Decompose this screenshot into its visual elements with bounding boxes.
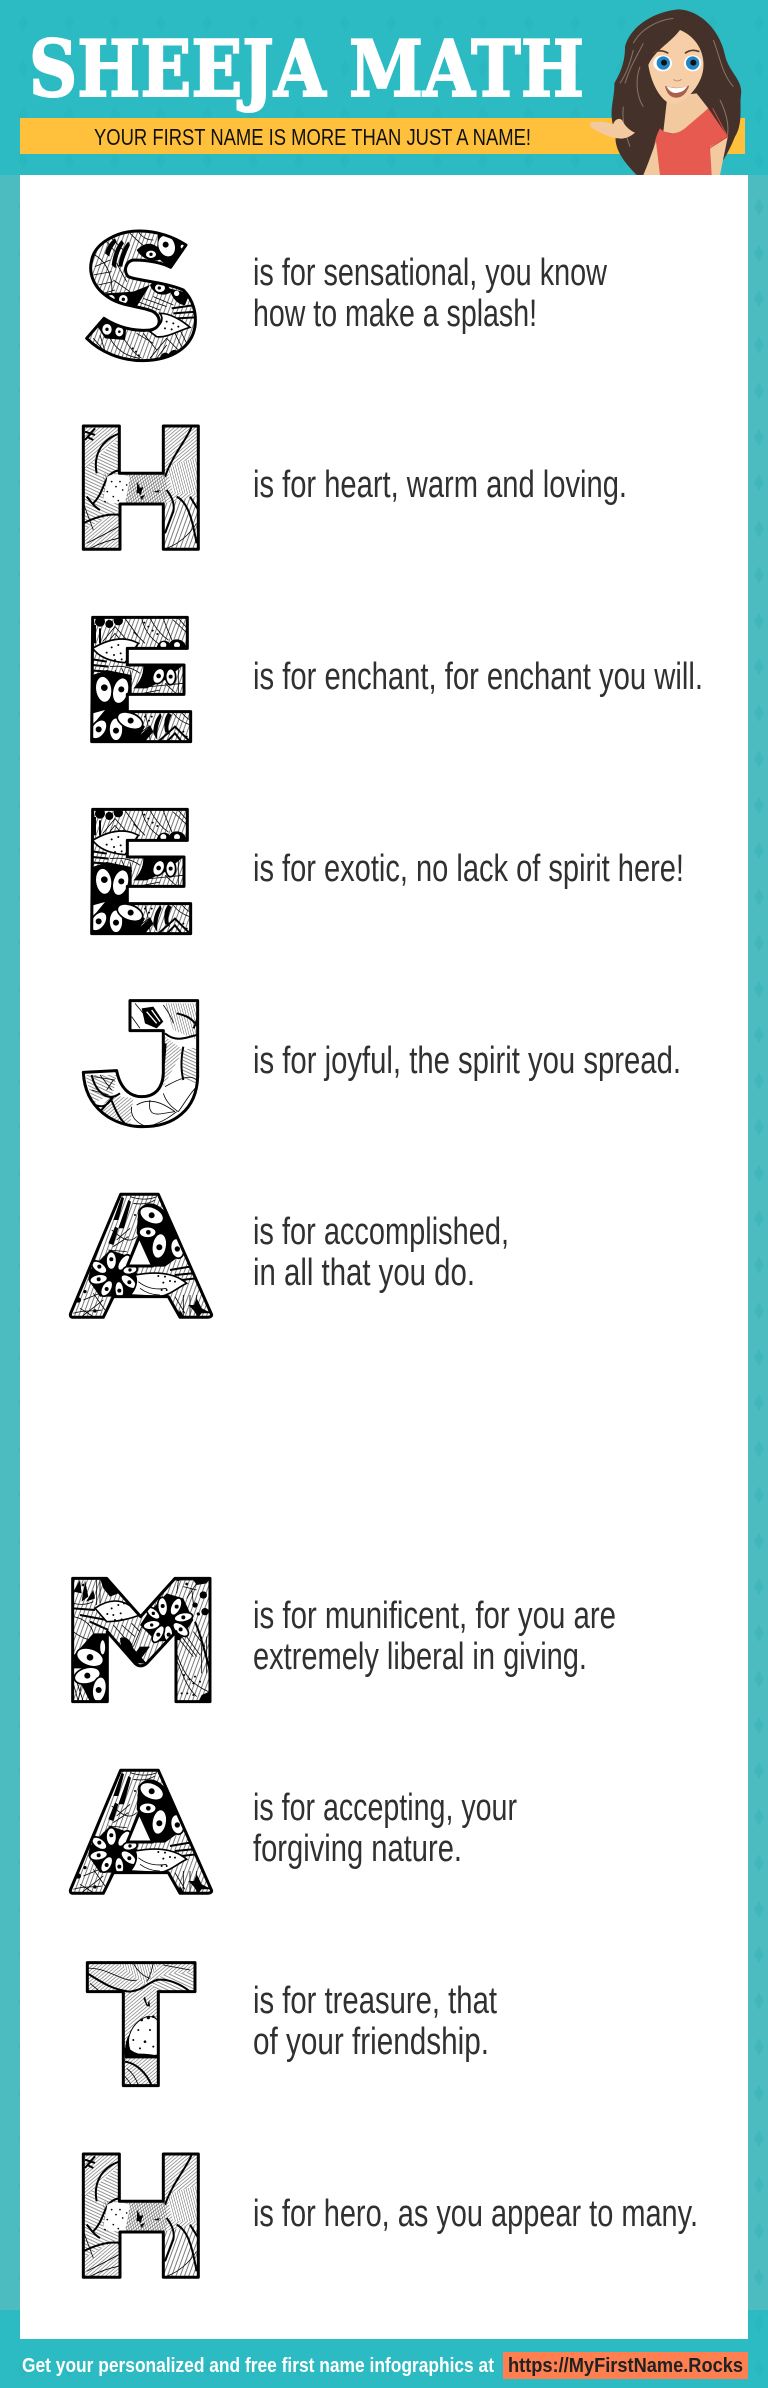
- text: second A lines: [253, 1787, 517, 1870]
- text: M lines: is for munificent, for you are: [253, 1595, 616, 1637]
- row: M: [70, 1577, 616, 1703]
- footer text: Get your personalized and free first name infographics at: [22, 2355, 494, 2377]
- icon: decorated letter A: [68, 1193, 213, 1318]
- text: S line: [253, 252, 607, 335]
- row: J: [83, 1001, 681, 1127]
- text: M lines: extremely liberal in giving.: [253, 1636, 587, 1678]
- row: E second: [87, 807, 684, 935]
- row: H: [82, 423, 627, 552]
- text: A lines: [253, 1211, 509, 1294]
- text: T lines: is for treasure, that: [253, 1980, 497, 2022]
- row: A: [68, 1193, 509, 1318]
- row: E: [87, 615, 703, 743]
- text: T lines: [253, 1980, 497, 2063]
- text: S line: how to make a splash!: [253, 293, 537, 335]
- icon: decorated letter E: [87, 615, 193, 743]
- text: M lines: [253, 1595, 616, 1678]
- row: A second: [68, 1769, 517, 1894]
- banner: [20, 118, 745, 154]
- icon: decorated letter T: [85, 1960, 197, 2087]
- footer: [22, 2352, 748, 2379]
- row: H second: [82, 2151, 698, 2280]
- text: H line: is for heart, warm and loving.: [253, 464, 627, 506]
- row: T: [85, 1960, 497, 2087]
- icon: decorated letter A: [68, 1769, 213, 1894]
- text: S line: is for sensational, you know: [253, 252, 607, 294]
- title: SHEEJA MATH: [29, 24, 584, 115]
- text: A lines: in all that you do.: [253, 1252, 475, 1294]
- icon: decorated letter H: [82, 423, 202, 552]
- illustration: woman with raised hand: [590, 9, 741, 175]
- text: second A lines: forgiving nature.: [253, 1828, 462, 1870]
- icon: decorated letter H: [82, 2151, 202, 2280]
- text: A lines: is for accomplished,: [253, 1211, 509, 1253]
- icon: decorated letter S: [83, 227, 200, 363]
- text: second A lines: is for accepting, your: [253, 1787, 517, 1829]
- footer link badge: https://MyFirstName.Rocks: [508, 2355, 743, 2377]
- icon: decorated letter J: [83, 1001, 198, 1127]
- icon: decorated letter E: [87, 807, 193, 935]
- text: T lines: of your friendship.: [253, 2021, 489, 2063]
- row: S: [83, 227, 607, 363]
- icon: decorated letter M: [70, 1577, 213, 1703]
- banner: YOUR FIRST NAME IS MORE THAN JUST A NAME!: [94, 124, 531, 150]
